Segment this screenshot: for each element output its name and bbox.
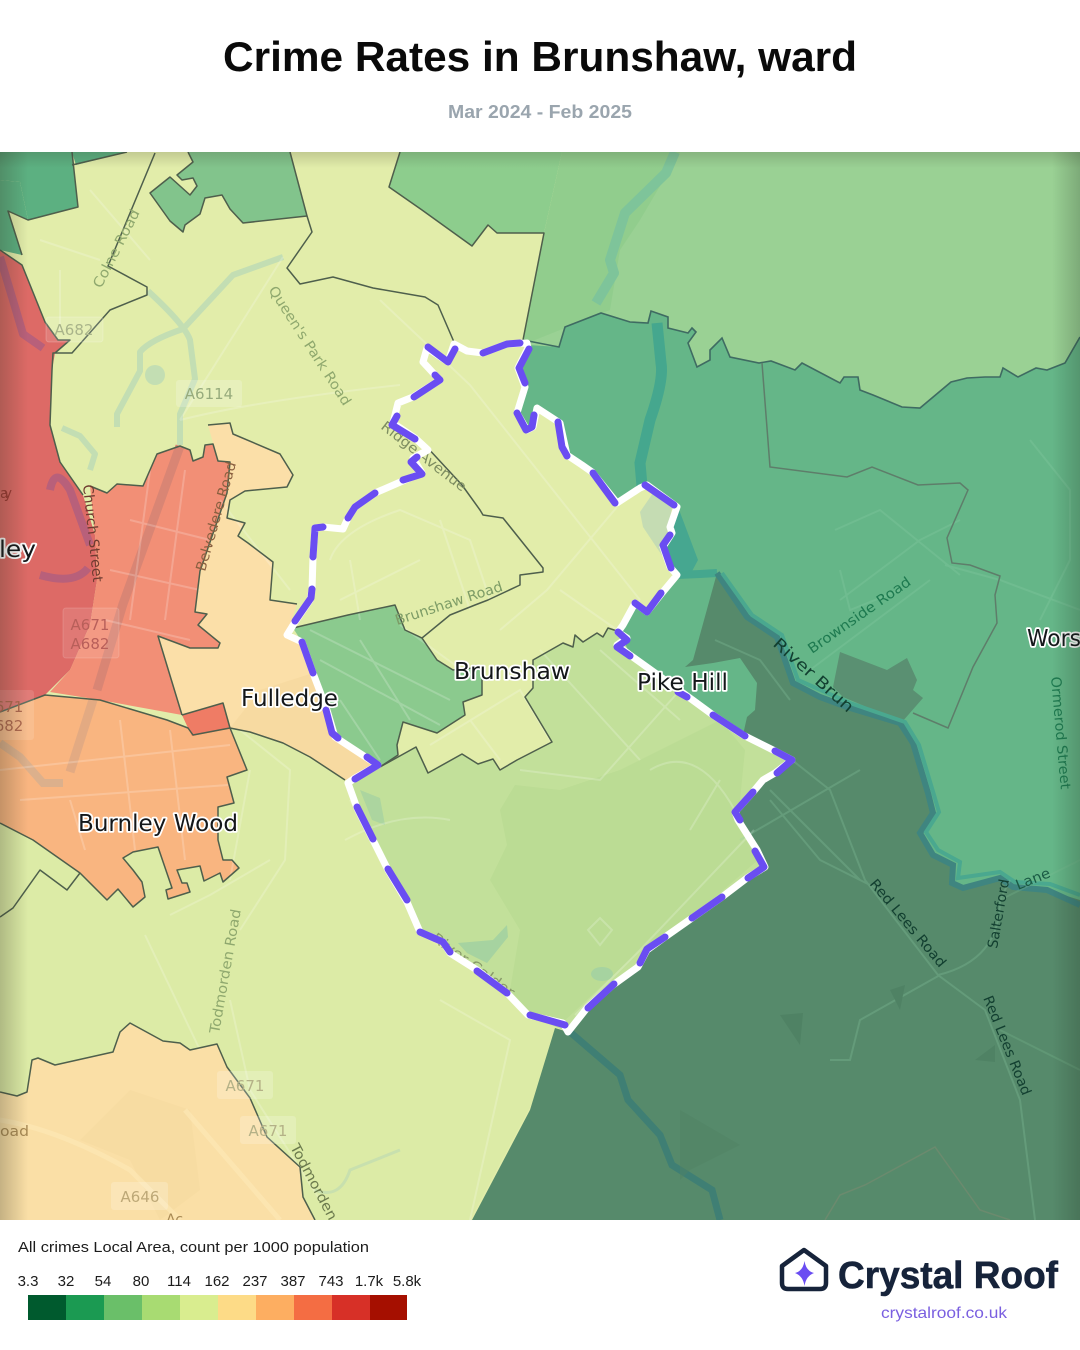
road network: [0, 190, 754, 1220]
legend scale labels: 5.8k: [393, 1273, 422, 1290]
map edge fade: top: [0, 152, 1080, 168]
region: central-west green Brunshaw block: [293, 605, 482, 767]
legend scale labels: 3.3: [18, 1273, 38, 1290]
darker hills in bottom left: [80, 1090, 200, 1220]
road shield: A682: A682: [55, 321, 93, 339]
region: lower-left pale green: [0, 728, 570, 1220]
road label: Ormerod Street: Ormerod Street: [1047, 676, 1073, 790]
road label: Colne Road: Colne Road: [90, 207, 144, 291]
legend scale labels: 32: [58, 1273, 74, 1290]
road shield: A671 A682: A671: [71, 616, 109, 634]
Brunshaw ward boundary: purple dashes: [295, 343, 792, 1025]
ward boundary lines: [0, 152, 620, 1220]
region: light orange Fulledge: [158, 423, 378, 780]
road label: River Brun: River Brun: [769, 634, 858, 716]
lake side teal patch: [668, 511, 698, 571]
subtitle: date range: Mar 2024 - Feb 2025: [448, 102, 632, 122]
southern river: [570, 1032, 720, 1220]
interior grey ward line east: [762, 363, 1000, 728]
ponds in lower ward: [458, 925, 508, 963]
road label: Ridge Avenue: Ridge Avenue: [378, 419, 469, 495]
east region boundary lines: [523, 311, 1080, 408]
legend scale labels: 387: [280, 1273, 306, 1290]
legend scale labels: 1.7k: [355, 1273, 384, 1290]
region: red Burnley centre: [0, 250, 97, 712]
region: far top left dark green: [0, 152, 78, 220]
road shield: A6114: [176, 380, 242, 407]
red area river: [0, 257, 90, 579]
region: top centre green: [389, 152, 562, 246]
faint track in the south: [825, 1147, 1010, 1220]
place label: Burnley (cropped): ley: [0, 537, 36, 563]
canal and river through upper left: [62, 257, 283, 470]
legend: [18, 1239, 422, 1320]
region: salmon area: [50, 444, 230, 715]
upper river through light green: [596, 152, 675, 303]
region: dark green south east: [472, 573, 1080, 1220]
Crystal Roof logo: [782, 1250, 1058, 1322]
road shield: A671 upper: [217, 1071, 273, 1099]
place label: Pike Hill: Pike Hill: [637, 670, 728, 696]
road shield: A671 lower: A671: [249, 1122, 287, 1140]
Brunshaw ward boundary: white underlay: [287, 343, 792, 1032]
road label: Red Lees Road north: Red Lees Road: [866, 876, 949, 971]
region: main mid green east: [517, 311, 1080, 905]
logo wordmark: Crystal Roof: [838, 1255, 1058, 1297]
road label: road fragment: oad: [0, 1124, 29, 1140]
road label: River Calder: River Calder: [429, 930, 518, 1001]
road label: Queen's Park Road: Queen's Park Road: [265, 283, 354, 409]
canal lower right of map bottom: [315, 1150, 400, 1192]
road network on green areas: [715, 440, 1080, 1220]
river link to dark wedge: [677, 573, 717, 575]
road label: Belvedere Road: Belvedere Road: [193, 460, 240, 573]
icon: purple star: [795, 1261, 814, 1286]
river corridor north east teal: [640, 323, 662, 486]
base pale yellow-green area: [1, 152, 673, 1220]
Fulledge lower darker part: [230, 673, 378, 780]
legend colour swatches: [28, 1295, 407, 1320]
motorway through salmon: [97, 446, 180, 690]
region: left edge green: [0, 180, 28, 255]
road shield: A6114: A6114: [185, 385, 233, 403]
road shield: A682: [46, 317, 103, 342]
road label: Salterford: Salterford: [985, 878, 1013, 950]
pond south: [591, 967, 613, 981]
region: bottom left light orange: [0, 1023, 315, 1220]
road shield: A671 A682: A682: [71, 635, 109, 653]
region: orange Burnley Wood: [0, 695, 247, 907]
legend scale labels: 162: [204, 1273, 230, 1290]
road label: Burnley way fragment: ay: [0, 486, 12, 502]
place label: Fulledge: Fulledge: [241, 686, 338, 712]
map edge fade: right: [1052, 152, 1080, 1220]
road shield: A646: A646: [121, 1188, 159, 1206]
road label: Lane: Lane: [1014, 865, 1053, 894]
road shield: cropped A671 A682: [0, 690, 34, 740]
pond upper left: [145, 365, 165, 385]
choropleth map: [0, 152, 1080, 1228]
lake in upper ward: [640, 493, 672, 557]
road label: Todmorden Road: Todmorden Road: [207, 908, 245, 1036]
road shield: A671 A682: [63, 608, 119, 658]
river Brun teal edge: [722, 573, 1080, 895]
region: dark patch east of River Brun: [833, 652, 923, 722]
road shield: A671 upper: A671: [226, 1077, 264, 1095]
road label: Church Street: Church Street: [79, 484, 105, 583]
region: strip left of upper river: [524, 153, 666, 341]
road label: Brunshaw Road: Brunshaw Road: [393, 579, 505, 629]
logo url: crystalroof.co.uk: [881, 1305, 1008, 1322]
place label: Burnley Wood: Burnley Wood: [78, 811, 238, 837]
south field patches: [680, 985, 995, 1180]
road label: Red Lees Road south: Red Lees Road: [979, 994, 1034, 1098]
legend scale labels: 80: [133, 1273, 149, 1290]
pond west: [360, 790, 385, 825]
title: Crime Rates in Brunshaw, ward: [223, 33, 857, 80]
legend scale labels: 237: [242, 1273, 268, 1290]
region: small red patch: [182, 703, 230, 736]
lower ward inner darker field: [740, 812, 741, 814]
road shield: A646: [111, 1182, 168, 1210]
road shield: A671 lower: [240, 1116, 296, 1144]
place label: Brunshaw: Brunshaw: [454, 659, 570, 685]
river Brun: [717, 573, 1080, 905]
region: top left strip: [72, 152, 127, 165]
legend scale labels: 743: [318, 1273, 344, 1290]
legend scale labels: [18, 1273, 422, 1290]
road: Red Lees surrounding branches: [1000, 860, 1080, 1070]
map edge fade: left: [0, 152, 28, 1220]
icon: house outline: [782, 1250, 826, 1289]
orange area river: [0, 743, 63, 783]
region: top left green block: [150, 152, 307, 232]
legend title: All crimes Local Area, count per 1000 population: [18, 1239, 369, 1256]
region: top right light green: [530, 152, 1080, 408]
road label: Todmorden lower: Todmorden: [286, 1140, 340, 1223]
orange area motorway: [70, 700, 93, 772]
legend scale labels: 114: [167, 1273, 191, 1290]
region: lower ward green: [348, 628, 792, 1032]
bottom left road: [0, 1110, 280, 1220]
road label: bottom fragment: Ac: [166, 1212, 183, 1228]
legend scale labels: 54: [95, 1273, 111, 1290]
road label: Brownside Road: Brownside Road: [805, 574, 914, 657]
